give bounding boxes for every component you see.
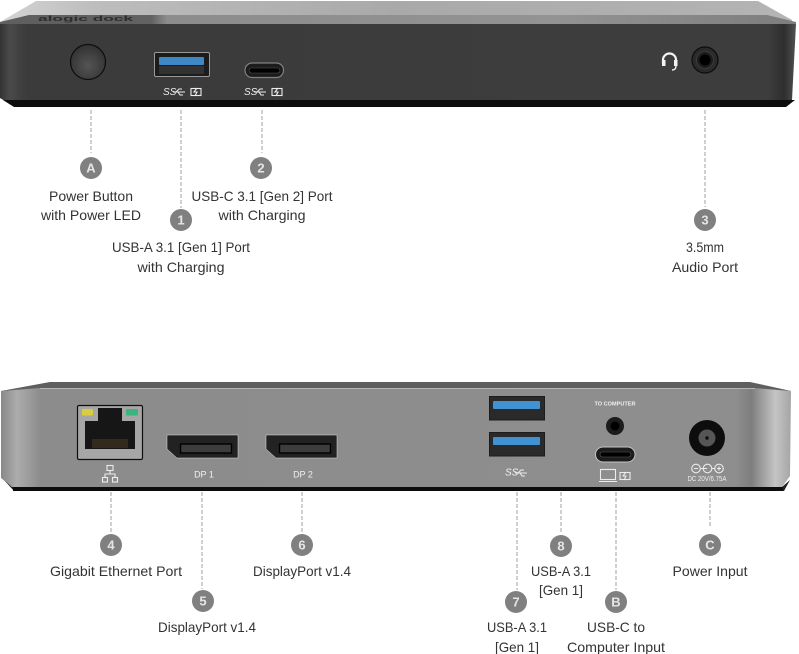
dock top surface [0,1,792,24]
callout 4: Ethernet port: Gigabit Ethernet Port [50,564,182,579]
dock back face [1,388,791,487]
callout B: USB-C to computer: B [611,594,621,610]
highlight line [40,388,755,390]
callout A: power button: with Power LED [40,208,141,223]
icon: headphones [662,54,677,70]
callout C: power input [672,492,748,579]
callout 2: USB-C port: with Charging [217,208,306,223]
callout 6: DisplayPort 2: DisplayPort v1.4 [253,564,351,579]
port: computer audio jack [606,417,624,435]
icon: SuperSpeed USB charging label 2 [244,87,282,98]
port: power button [70,44,106,80]
callout 3: audio port: 3.5mm [686,240,724,255]
icon: SuperSpeed USB charging label 1 [163,87,201,98]
callout A: power button [40,110,141,223]
callout 6: DisplayPort 2: 6 [298,538,306,552]
port: USB-C to computer [596,447,635,462]
dock bottom edge [3,100,795,107]
callout 2: USB-C port: 2 [257,160,265,176]
callout A: power button: A [86,160,96,176]
port: DisplayPort 1 [167,435,238,458]
callout 8: upper USB-A: USB-A 3.1 [531,564,591,579]
callout 7: lower USB-A [487,492,547,654]
port: USB-A charging [154,52,210,76]
callout 1: USB-A port: with Charging [136,260,224,275]
label: DP 1: DP 1 [194,470,214,480]
callout 7: lower USB-A: USB-A 3.1 [487,620,547,635]
callout 3: audio port: Audio Port [672,260,738,275]
label: DP 2: DP 2 [293,470,313,480]
icon: network [102,466,118,482]
callout 1: USB-A port: USB-A 3.1 [Gen 1] Port [112,240,250,255]
port: USB-A lower [490,432,544,456]
dock top band [0,15,796,26]
port: Ethernet [78,406,142,460]
icon: SuperSpeed USB [505,468,527,478]
callout 2: USB-C port: USB-C 3.1 [Gen 2] Port [192,189,333,204]
label: DC rating: DC 20V/6.75A [688,476,727,483]
dock back top edge [1,382,791,395]
callout 3: audio port: 3 [701,212,709,228]
callout 4: Ethernet port: 4 [107,538,115,552]
callout 7: lower USB-A: 7 [512,594,520,610]
port: power input [689,420,725,456]
callout 5: DisplayPort 1: DisplayPort v1.4 [158,620,256,635]
callout B: USB-C to computer: USB-C to [587,620,645,635]
port: USB-C charging [245,63,284,78]
label: to computer: TO COMPUTER [594,402,636,408]
callout 2: USB-C port [192,110,333,223]
icon: SuperSpeed USB: SS [505,468,519,478]
callout 6: DisplayPort 2 [253,492,351,579]
callout 8: upper USB-A [531,492,591,598]
panel: front of dock [0,1,796,107]
callout 4: Ethernet port [50,492,182,579]
callout C: power input: Power Input [672,564,748,579]
icon: SuperSpeed USB charging label 1: SS [163,87,177,98]
callout C: power input: C [705,538,715,552]
port: 3.5mm audio jack [692,47,718,73]
icon: DC polarity [692,464,723,473]
callout 1: USB-A port [112,110,250,275]
port: USB-A upper [490,396,544,420]
port: DisplayPort 2 [266,435,337,458]
panel: back of dock [1,382,791,491]
dock back bottom edge [4,480,790,491]
callout 5: DisplayPort 1 [158,492,256,635]
brand mark: alogic dock [38,16,133,23]
callout 5: DisplayPort 1: 5 [199,594,207,608]
dock front face [0,24,796,106]
callout B: USB-C to computer [567,492,665,654]
callout A: power button: Power Button [49,189,133,204]
callout 8: upper USB-A: 8 [557,538,565,554]
icon: SuperSpeed USB charging label 2: SS [244,87,258,98]
callout 3: audio port [672,110,738,275]
callout 8: upper USB-A: [Gen 1] [539,583,583,598]
icon: laptop with charging [599,470,630,482]
callout 1: USB-A port: 1 [177,212,185,228]
